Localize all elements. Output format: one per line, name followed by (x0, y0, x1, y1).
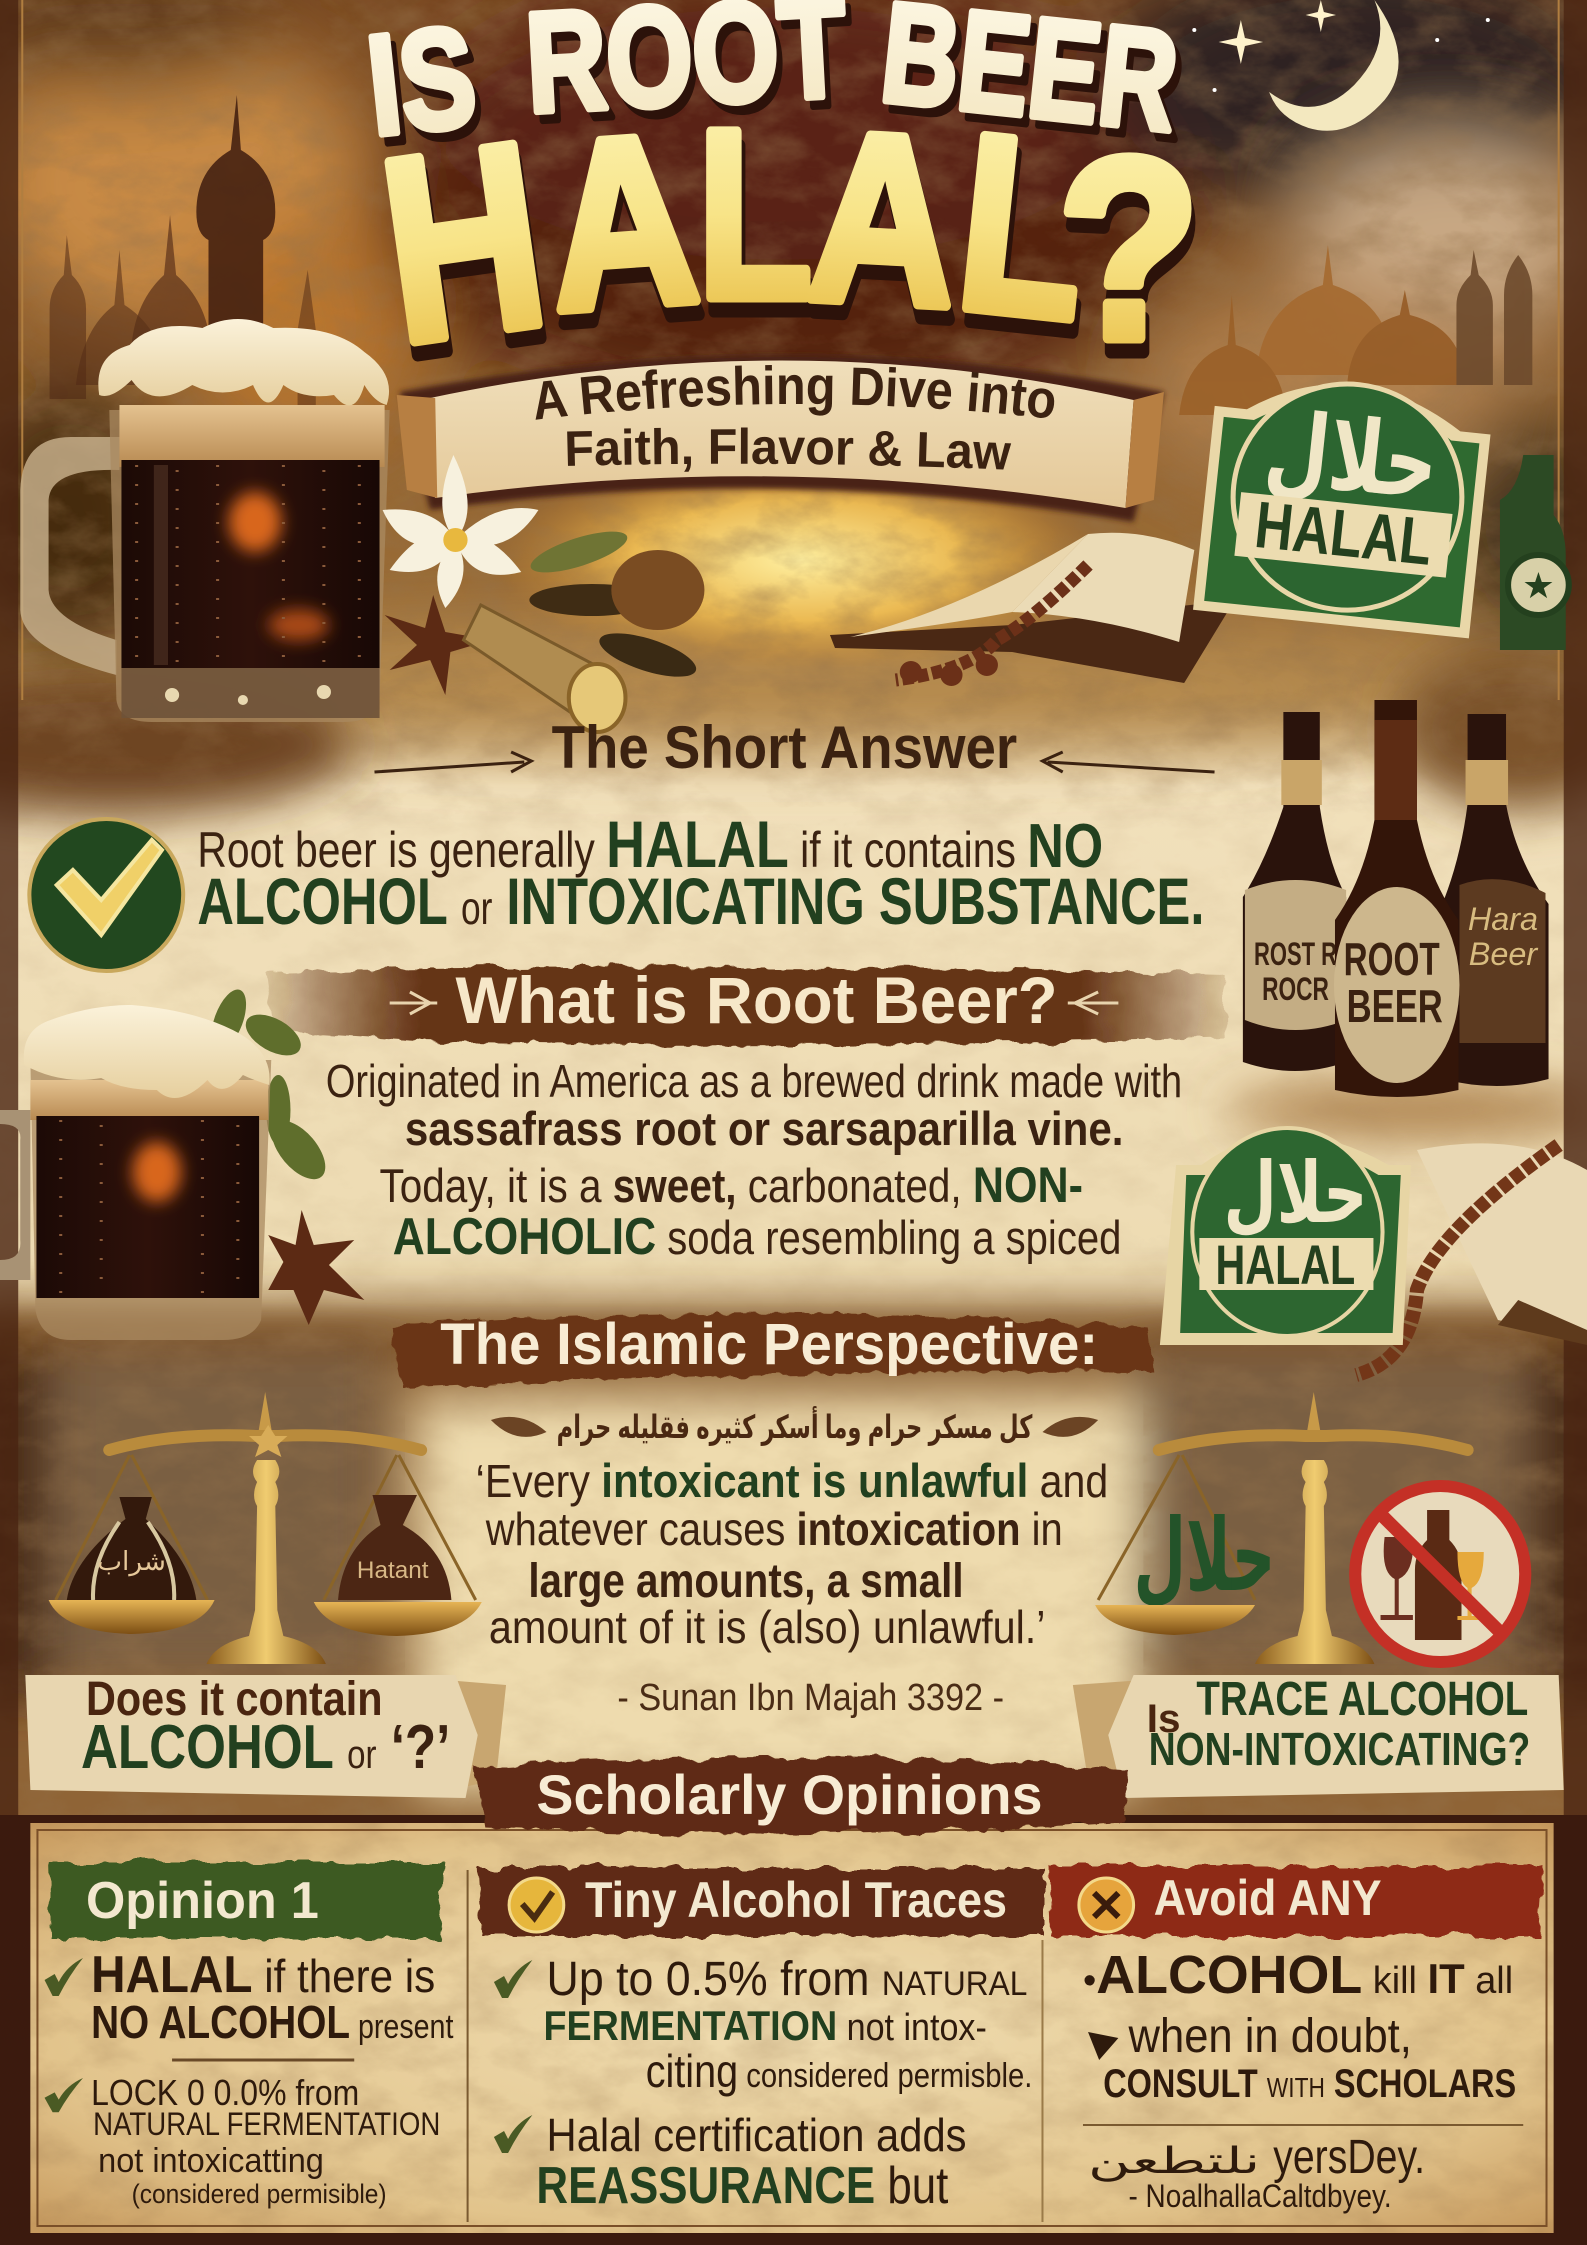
question scroll right: Is (1147, 1696, 1180, 1741)
title line: halal: L (701, 94, 815, 362)
question scroll right (1073, 1672, 1564, 1798)
arabic ornament (491, 1406, 1098, 1446)
bottle left: ROST R (1254, 936, 1337, 972)
star anise (268, 1210, 364, 1325)
ingredients: vanilla, anise, root (383, 455, 704, 732)
item 2: (considered permisible) (132, 2178, 387, 2209)
section banner: what is root beer (265, 964, 1225, 1045)
closing note: yersDey. (1273, 2130, 1425, 2184)
halal certification sign: HALAL (1252, 488, 1436, 580)
item 1: NO ALCOHOL present (91, 1996, 454, 2048)
question scroll left: Does it contain (86, 1672, 383, 1726)
left mosque skyline (50, 95, 316, 410)
icon: check badge (29, 819, 183, 971)
header (49, 1862, 445, 1938)
header (1049, 1866, 1543, 1936)
closing note: - NoalhallaCaltdbyey. (1129, 2178, 1392, 2214)
question scroll left (25, 1672, 506, 1798)
right mosque skyline (1179, 245, 1532, 415)
mug glass (109, 410, 390, 722)
hadith quote: - Sunan Ibn Majah 3392 - (617, 1676, 1004, 1719)
foam (98, 319, 389, 405)
column 2: tiny alcohol traces (478, 1868, 1045, 2215)
halal certification sign (1193, 370, 1494, 638)
item 1: FERMENTATION not intox- (544, 2002, 987, 2049)
item 1 (494, 1952, 1032, 2097)
book and beads, lower (1356, 1143, 1587, 1375)
root beer description: sassafrass root or sarsaparilla vine. (405, 1103, 1123, 1156)
second beer mug (0, 985, 364, 1340)
title line: halal: L (698, 80, 812, 348)
sassafras root (464, 605, 625, 732)
short answer text: Root beer is generally HALAL if it contains NO (197, 808, 1103, 882)
bag left: شراب (97, 1546, 166, 1577)
title line: is root beer (361, 0, 1191, 175)
bottle right (1442, 714, 1549, 1086)
title (361, 0, 1203, 412)
title line: halal: ? (1058, 104, 1200, 393)
item 2 (494, 2109, 967, 2215)
short answer text: ALCOHOL or INTOXICATING SUBSTANCE. (197, 865, 1204, 939)
open book and beads (830, 533, 1235, 686)
hadith quote: large amounts, a small (528, 1554, 964, 1608)
title line: halal: L (950, 95, 1103, 386)
question scroll left: ALCOHOL or ‘?’ (81, 1713, 450, 1782)
root beer description (326, 1055, 1182, 1266)
arabic ornament: كل مسكر حرام وما أسكر كثيره فقليله حرام (557, 1406, 1033, 1446)
mug handle (20, 437, 119, 675)
bag left (67, 1497, 196, 1600)
halal sign, lower: حلال (1224, 1145, 1367, 1240)
bottle right: Hara (1468, 901, 1538, 937)
small green bottle: ★ (1522, 565, 1555, 606)
root beer bottles (1243, 700, 1549, 1097)
arrow left (374, 752, 531, 772)
short answer heading: The Short Answer (552, 713, 1017, 781)
title line: halal: A (544, 97, 708, 375)
scale post (206, 1460, 326, 1664)
title line: halal: H (367, 87, 560, 398)
icon: gold check (509, 1878, 564, 1932)
header: Avoid ANY (1154, 1869, 1382, 1926)
item 2: Halal certification adds (547, 2109, 967, 2161)
halal sign, lower: HALAL (1216, 1233, 1355, 1296)
arrow right (1042, 752, 1215, 772)
opinions panel (0, 1757, 1587, 2245)
pans (49, 1600, 215, 1634)
foam (24, 1005, 270, 1098)
closing note: نلتطعن (1088, 2140, 1260, 2182)
header: Opinion 1 (86, 1872, 319, 1930)
bottle left: ROCR (1262, 971, 1329, 1007)
halal certification sign: حلال (1260, 392, 1443, 521)
item 2: REASSURANCE but (536, 2157, 949, 2215)
hadith quote: ‘Every intoxicant is unlawful and (476, 1455, 1108, 1508)
root beer description: Today, it is a sweet, carbonated, NON- (380, 1156, 1083, 1213)
ornament left (390, 992, 437, 1014)
icon: gold cross (1079, 1878, 1134, 1932)
column 1: opinion 1 (45, 1862, 454, 2209)
section banner: islamic perspective: The Islamic Perspective: (440, 1312, 1098, 1377)
bottle right: Beer (1469, 936, 1538, 972)
item 2: not intoxicatting (98, 2142, 324, 2180)
item 2: CONSULT WITH SCHOLARS (1103, 2061, 1516, 2106)
title line: halal: ? (1061, 118, 1203, 407)
section banner: scholarly opinions (476, 1757, 1129, 1834)
mug glass (30, 1060, 271, 1340)
flower (383, 455, 538, 608)
subtitle scroll banner (397, 354, 1167, 525)
section: the short answer (29, 713, 1215, 971)
item 2: when in doubt, (1128, 2009, 1412, 2063)
closing note (1088, 2130, 1425, 2214)
root beer description: Originated in America as a brewed drink made with (326, 1055, 1182, 1107)
item 1: Up to 0.5% from NATURAL (547, 1952, 1027, 2006)
title line: halal: A (803, 81, 963, 357)
hadith quote: amount of it is (also) unlawful.’ (489, 1601, 1046, 1653)
vanilla pods (526, 523, 704, 686)
item 1: •ALCOHOL kill IT all (1083, 1944, 1513, 2005)
bottle left (1243, 712, 1346, 1071)
item 2: LOCK 0 0.0% from (91, 2072, 359, 2113)
scales right (1095, 1392, 1468, 1664)
hadith quote: whatever causes intoxication in (485, 1503, 1063, 1555)
bag right (338, 1495, 451, 1600)
small green bottle (1500, 455, 1569, 650)
item 2: NATURAL FERMENTATION (93, 2106, 440, 2142)
header: Tiny Alcohol Traces (585, 1871, 1007, 1928)
item 1: HALAL if there is (91, 1946, 435, 2004)
bottle centre: BEER (1347, 980, 1443, 1032)
title line: halal: H (370, 101, 563, 412)
item 1: citing considered permisble. (646, 2045, 1032, 2097)
title line: halal (367, 80, 1203, 412)
bottle centre (1334, 700, 1459, 1097)
section banner: what is root beer: What is Root Beer? (455, 964, 1058, 1038)
title line: halal: A (541, 83, 705, 361)
subtitle scroll banner: Faith, Flavor & Law (567, 428, 1012, 472)
item 2 (1088, 2009, 1516, 2106)
item 1 (45, 1946, 454, 2048)
bottle centre: ROOT (1344, 933, 1440, 985)
halal sign, lower (1160, 1128, 1411, 1345)
title line: halal: L (947, 81, 1100, 372)
arabic word halal: حلال (1134, 1501, 1275, 1612)
ornament right (1068, 992, 1118, 1014)
column 3: avoid any (1049, 1866, 1543, 2214)
short answer text (197, 808, 1204, 939)
bag right: Hatant (357, 1557, 429, 1584)
header (478, 1868, 1045, 1936)
crescent moon and stars (1192, 0, 1490, 131)
hadith quote (476, 1455, 1108, 1719)
item 2 (45, 2072, 440, 2209)
leaves (204, 985, 335, 1188)
icon: no alcohol sign (1355, 1486, 1525, 1662)
subtitle scroll banner: A Refreshing Dive into (536, 365, 1054, 420)
title line: is root beer: IS (367, 6, 489, 175)
beer mug (20, 319, 390, 722)
scale beam (109, 1435, 421, 1450)
star anise (385, 595, 491, 695)
root beer description: ALCOHOLIC soda resembling a spiced (393, 1208, 1121, 1266)
section banner: scholarly opinions: Scholarly Opinions (536, 1763, 1042, 1826)
scales left (49, 1392, 482, 1664)
title line: halal: A (806, 95, 966, 371)
